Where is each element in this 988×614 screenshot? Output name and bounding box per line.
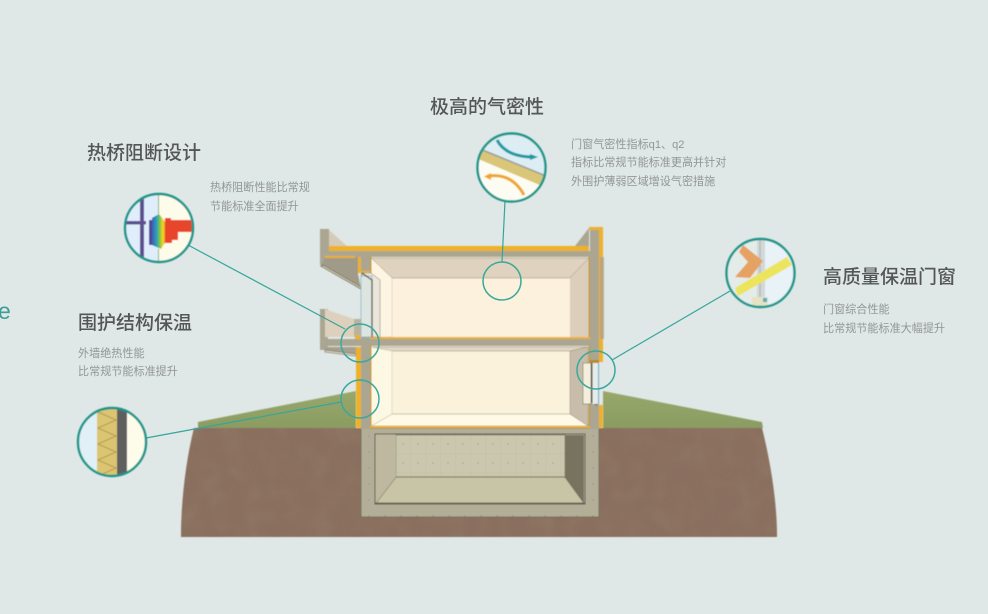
window frame (592, 363, 597, 405)
room left edge (370, 257, 372, 337)
window top insulation (590, 360, 599, 363)
detail ring: thermal bridge (341, 324, 379, 362)
middle floor slab (320, 339, 590, 346)
upper left window (361, 273, 380, 337)
left lower wall insulation (356, 347, 361, 428)
left concrete wall (361, 251, 370, 429)
basement left side wall (376, 435, 396, 503)
right wall upper insulation (599, 228, 603, 362)
description: 外围护薄弱区域增设气密措施 (571, 174, 715, 188)
earth mottling (181, 428, 777, 537)
leader line: windows (612, 291, 730, 360)
icon: window frame section (726, 239, 796, 307)
lower room left wall (371, 347, 392, 426)
mid balcony infill (325, 309, 354, 337)
description: 门窗综合性能 (823, 302, 890, 316)
basement (361, 428, 599, 517)
leader line: airtightness (502, 201, 505, 262)
window glass (592, 363, 598, 404)
window frame (362, 273, 372, 337)
lower room floor insulation (370, 426, 590, 428)
upper room floor insulation (370, 337, 590, 339)
callout: windows (726, 239, 956, 335)
lower canopy edge (325, 350, 356, 356)
description: 指标比常规节能标准更高并针对 (571, 155, 726, 169)
leader line: envelope (146, 402, 341, 438)
lower right window (583, 360, 599, 405)
icon: wall layers (78, 408, 147, 476)
upper room left wall (371, 258, 392, 337)
roof slab (320, 251, 590, 257)
basement back wall (396, 435, 565, 477)
right parapet cap insulation (589, 227, 603, 230)
upper room back wall (370, 257, 590, 338)
yellow insulation layers (325, 227, 603, 428)
upper canopy edge (321, 265, 361, 289)
detail ring: roof (483, 262, 521, 300)
lower room floor (371, 414, 589, 426)
heading: 热桥阻断设计 (87, 142, 201, 164)
lower canopy soffit (325, 347, 356, 355)
balcony end block (354, 319, 361, 337)
callout: airtightness (430, 96, 726, 203)
lintel insulation (358, 257, 370, 273)
icon: thermal bridge heat map (125, 194, 193, 262)
lower room ceiling (372, 347, 588, 351)
building cross-section (320, 227, 604, 517)
description: 门窗气密性指标q1、q2 (571, 137, 684, 151)
upper room (370, 257, 590, 338)
earth mound (181, 428, 777, 537)
description: 节能标准全面提升 (210, 199, 299, 213)
lower room (370, 346, 590, 427)
leader line: thermal bridge (188, 245, 345, 329)
roof parapet infill (329, 230, 347, 246)
right concrete wall (590, 228, 599, 429)
detail ring: wall (341, 380, 379, 418)
right wall lower insulation (599, 405, 603, 428)
balcony insulation (355, 335, 361, 339)
heading: 围护结构保温 (78, 312, 192, 334)
window glazing line (598, 363, 600, 405)
upper room right wall (570, 258, 589, 337)
basement floor (376, 477, 584, 503)
room right edge (588, 257, 590, 337)
right parapet slope (575, 228, 589, 246)
heading: 高质量保温门窗 (823, 266, 956, 288)
basement interior opening (375, 434, 585, 504)
description: 外墙绝热性能 (78, 346, 145, 360)
icon: airflow through membrane (476, 133, 547, 203)
concrete structure (320, 228, 599, 429)
description: 比常规节能标准提升 (78, 364, 178, 378)
window glass (361, 276, 372, 337)
canopy details (321, 230, 361, 356)
lower room right edge (588, 346, 590, 426)
window reveal (583, 363, 591, 404)
callout: thermal bridge (87, 142, 310, 262)
description: 比常规节能标准大幅提升 (823, 321, 945, 335)
mid left parapet (320, 309, 328, 350)
roof insulation (329, 246, 589, 251)
heading: 极高的气密性 (430, 96, 544, 118)
lower room back wall (370, 346, 590, 427)
upper canopy soffit (322, 257, 361, 289)
upper canopy insulation (325, 256, 355, 258)
detail ring: window (577, 351, 615, 389)
description: 热桥阻断性能比常规 (210, 180, 310, 194)
callout: envelope insulation (78, 312, 192, 476)
ground: earth and grass (181, 391, 777, 537)
basement right side wall (565, 435, 584, 503)
basement concrete shell (361, 428, 599, 517)
earth fine texture (181, 428, 777, 537)
lower room left edge (370, 346, 372, 426)
upper left parapet (320, 229, 329, 265)
window reveal (362, 273, 380, 337)
upper room ceiling (371, 258, 589, 278)
right wall cladding (600, 257, 604, 339)
grass embankment (198, 391, 763, 428)
lower room right wall (570, 347, 588, 426)
